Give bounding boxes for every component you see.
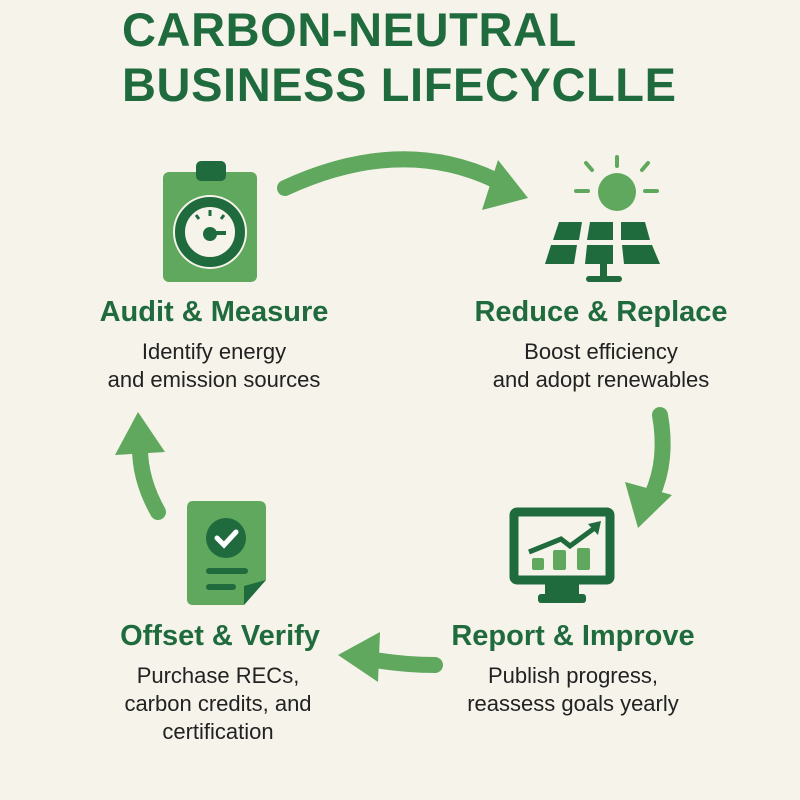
title: CARBON-NEUTRAL (122, 3, 577, 56)
heading: offset: Offset & Verify (120, 620, 320, 652)
text: reduce: and adopt renewables (493, 367, 709, 392)
heading: report: Report & Improve (451, 620, 695, 652)
text: reduce (493, 339, 709, 392)
heading: audit: Audit & Measure (100, 296, 328, 328)
text: offset: certification (162, 719, 274, 744)
icon: monitor chart (514, 512, 610, 603)
icon: solar panel (545, 157, 660, 282)
text: reduce: Boost efficiency (524, 339, 678, 364)
arrow: top (285, 159, 528, 210)
text: report (467, 663, 679, 716)
text: offset (124, 663, 312, 744)
icon: clipboard gauge (163, 161, 257, 282)
text: report: reassess goals yearly (467, 691, 679, 716)
arrow: right (625, 415, 672, 528)
text: audit: Identify energy (142, 339, 286, 364)
title: BUSINESS LIFECYCLLE (122, 58, 677, 111)
text: offset: Purchase RECs, (137, 663, 299, 688)
heading: reduce: Reduce & Replace (474, 296, 728, 328)
arrow: left (115, 412, 165, 512)
title (122, 3, 677, 111)
text: offset: carbon credits, and (124, 691, 312, 716)
text: audit: and emission sources (108, 367, 320, 392)
text: report: Publish progress, (488, 663, 658, 688)
text: audit (108, 339, 320, 392)
arrow: bottom (338, 632, 435, 682)
icon: certificate document (187, 501, 266, 605)
